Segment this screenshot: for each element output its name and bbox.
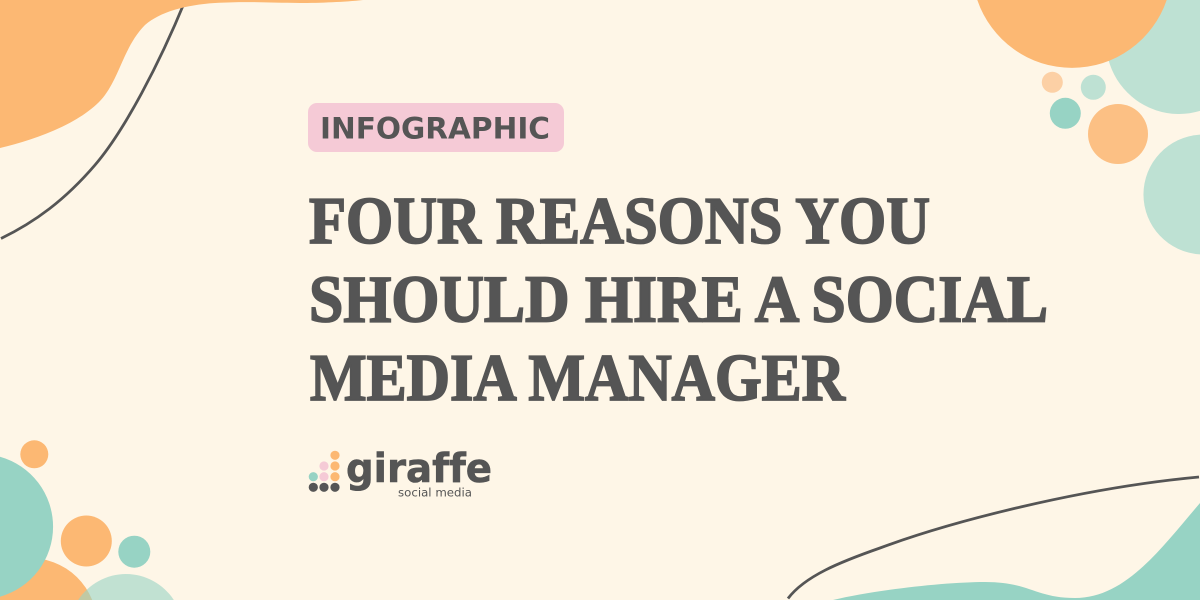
top-left curved line (1, 1, 185, 238)
title (309, 184, 1048, 415)
logo wordmark: giraffe (346, 446, 492, 492)
bottom-right curved line (788, 477, 1199, 598)
tag: infographic (308, 103, 564, 152)
logo dots (309, 451, 340, 492)
logo tagline: social media (398, 486, 472, 500)
bottom-left circles (0, 440, 174, 600)
bottom-right teal blob (833, 503, 1200, 600)
logo: giraffe social media (309, 446, 492, 500)
top-left orange blob (0, 0, 363, 148)
title: FOUR REASONS YOU (309, 184, 930, 258)
title: SHOULD HIRE A SOCIAL (309, 262, 1048, 336)
tag: infographic: INFOGRAPHIC (320, 111, 550, 145)
title: MEDIA MANAGER (310, 341, 846, 415)
top-right circles (977, 0, 1200, 254)
